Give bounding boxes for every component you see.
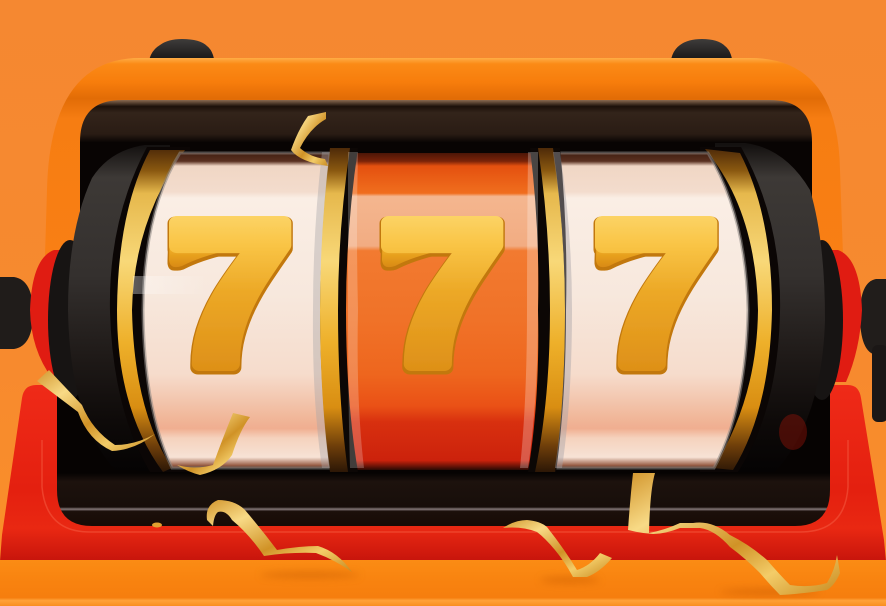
orange frame [45, 58, 843, 255]
ribbon: left [37, 370, 155, 451]
left gold ring [110, 147, 190, 472]
reel: centre [340, 153, 540, 470]
left handle [0, 240, 92, 400]
left end cap [68, 145, 170, 472]
top knobs [148, 39, 733, 70]
ribbon: left small [177, 413, 250, 475]
gold divider right [520, 148, 572, 472]
gold divider left [313, 148, 364, 472]
red rim highlight [42, 440, 848, 532]
ribbon: floor right [628, 473, 840, 595]
right handle [801, 240, 886, 422]
bottom orange floor [0, 560, 886, 606]
dark window [57, 100, 830, 526]
seven centre: 7 [379, 178, 506, 408]
reel light streak [133, 276, 208, 294]
gold fleck [152, 522, 162, 528]
reel: right [555, 153, 748, 468]
seven left: 7 [167, 178, 294, 408]
ribbon: floor centre [503, 520, 612, 577]
red base [0, 385, 886, 561]
right end cap [715, 143, 825, 472]
ribbon shadows on floor [260, 572, 820, 595]
reel: left [143, 153, 330, 468]
right gold ring [700, 147, 780, 472]
ribbon: top [291, 112, 328, 166]
seven right: 7 [593, 178, 720, 408]
ribbon: floor left [207, 500, 352, 572]
